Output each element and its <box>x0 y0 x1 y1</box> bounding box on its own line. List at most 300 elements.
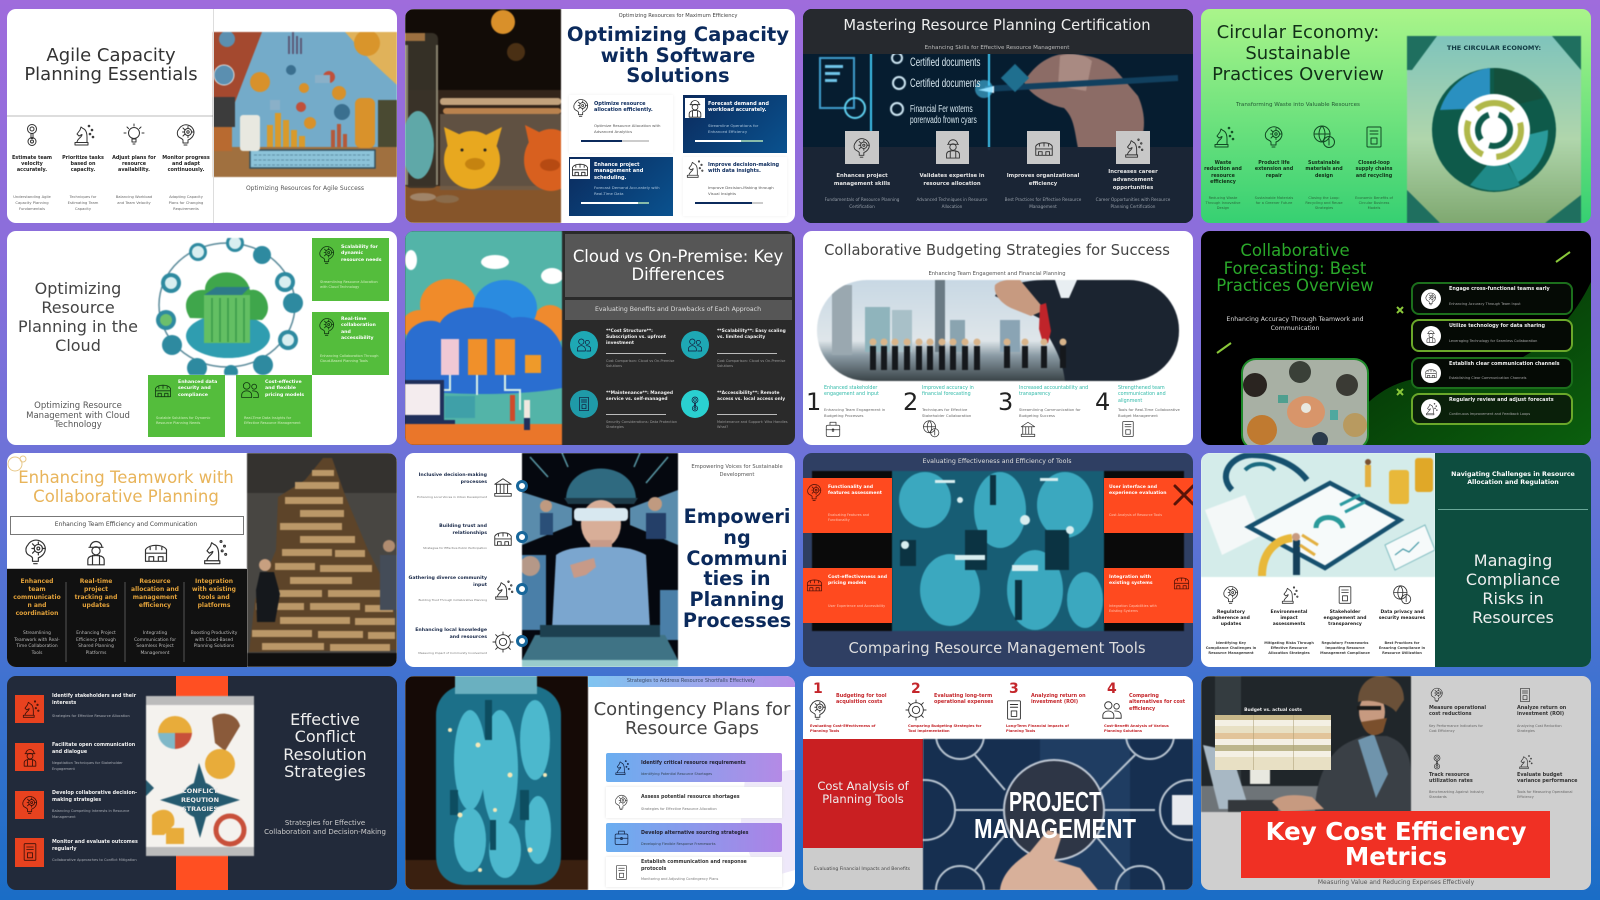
top band with subtitle <box>588 676 795 687</box>
heading <box>192 578 236 610</box>
heading: management skills <box>834 181 890 187</box>
slide title: Empoweri <box>684 505 790 528</box>
heading <box>1324 610 1366 628</box>
subtitle: Empowering Voices for Sustainable <box>691 464 783 470</box>
slide title <box>18 468 234 506</box>
item: monitor outcomes <box>15 838 143 868</box>
caption: Negotiation Techniques for Stakeholder <box>52 761 123 765</box>
caption <box>828 513 869 523</box>
caption: Teamwork with Real- <box>14 638 60 642</box>
heading: transparency <box>1019 392 1051 397</box>
icon: brain gear <box>1262 125 1286 149</box>
heading <box>641 859 747 873</box>
icon glyph <box>687 337 703 353</box>
icon: brain gear <box>22 538 50 566</box>
slide title: Planning Tools <box>822 792 904 806</box>
caption <box>1005 196 1081 210</box>
slide title: Resource <box>41 298 115 317</box>
heading: Prioritize tasks <box>62 155 104 161</box>
caption: Forecast Demand Accurately with <box>594 185 660 190</box>
number: 1 <box>806 388 821 416</box>
slide title: Key Cost Efficiency <box>1266 817 1526 846</box>
heading <box>178 380 217 399</box>
caption <box>594 185 660 196</box>
heading <box>606 391 673 403</box>
heading: Engage cross-functional teams early <box>1449 286 1550 292</box>
card: optimize allocation <box>569 95 673 153</box>
checklist line 3 <box>910 104 977 126</box>
caption: Boosting Productivity <box>191 631 237 636</box>
caption: Existing Systems <box>1109 609 1138 613</box>
caption: Seamless Project <box>136 644 174 649</box>
heading: velocity <box>21 161 43 167</box>
caption <box>1517 724 1562 734</box>
heading <box>112 155 156 173</box>
green side panel <box>1435 453 1591 667</box>
heading: variance performance <box>1517 778 1578 784</box>
slide title: Optimizing Capacity <box>567 23 789 46</box>
icon: board on red <box>15 838 44 867</box>
heading: Closed-loop <box>1358 161 1390 166</box>
heading <box>1108 168 1158 192</box>
checklist line 3: porenvado frown cyars <box>910 115 977 126</box>
heading <box>1031 693 1086 706</box>
caption: Developing Flexible Response Frameworks <box>641 842 716 846</box>
caption: Budgeting Processes <box>824 413 863 418</box>
slide title: Collaborative <box>1240 241 1350 260</box>
caption: Balancing Competing Interests in Resource <box>52 809 129 813</box>
caption <box>52 761 123 772</box>
panel: Mastering Resource Planning Certification <box>803 9 1193 223</box>
subtitle: Evaluating Effectiveness and Efficiency of Tools <box>922 458 1072 465</box>
icon: target gauge <box>27 124 37 146</box>
heading: compliance <box>178 393 208 398</box>
heading: pricing models <box>828 581 866 586</box>
item: product life <box>1249 124 1299 216</box>
heading: resource allocation <box>923 181 981 187</box>
caption: Cloud-Based Planning Tools <box>320 359 368 363</box>
item: scalability <box>679 328 791 378</box>
caption <box>1109 604 1157 614</box>
heading <box>1429 705 1486 718</box>
caption: Estimating Team <box>68 201 98 205</box>
heading: Functionality and <box>828 485 873 490</box>
heading: Enhances project <box>836 173 888 179</box>
subtitle <box>1226 316 1364 333</box>
slide title: Cloud vs On-Premise: Key <box>573 247 783 266</box>
red title box <box>1241 811 1550 878</box>
caption <box>169 195 203 211</box>
item: environmental <box>1263 583 1315 663</box>
caption: Stakeholder Collaboration <box>922 413 971 418</box>
heading: Integration <box>195 578 233 585</box>
pill: engage teams <box>1411 282 1573 315</box>
heading: pricing models <box>265 393 304 398</box>
heading: operational expenses <box>934 699 993 705</box>
column: project tracking <box>67 578 125 663</box>
slide title: with Software <box>601 44 755 66</box>
icon: knight on red <box>15 695 44 723</box>
heading <box>12 155 52 173</box>
icon: chart board <box>1003 699 1025 721</box>
slide title: Processes <box>683 609 791 632</box>
image: piggy banks in jars <box>405 9 562 223</box>
caption <box>13 195 51 211</box>
heading: Develop alternative sourcing strategies <box>641 831 749 836</box>
icon: brain gear <box>1221 585 1241 605</box>
heading: Enhanced data <box>178 380 217 385</box>
caption: Fundamentals of Resource Planning <box>825 197 899 202</box>
heading <box>341 245 382 264</box>
caption: Techniques for <box>70 195 96 199</box>
card: scalability <box>312 238 389 301</box>
slide title: Risks in <box>1482 589 1544 608</box>
icon glyph <box>576 337 592 353</box>
heading <box>1517 705 1566 718</box>
icon: knight <box>492 579 514 601</box>
column: resource allocation <box>126 578 184 663</box>
caption: Effective Resource <box>1271 646 1307 650</box>
heading: Improved accuracy in <box>922 386 974 391</box>
icon: chess knight <box>74 124 94 146</box>
heading: Enhanced <box>21 578 53 585</box>
heading: Enhanced stakeholder <box>824 386 877 391</box>
caption: Balancing Workload <box>116 195 152 199</box>
heading: adherence and <box>1212 616 1250 621</box>
heading: utilization rates <box>1429 778 1473 784</box>
checklist line 1: Certified documents <box>910 55 980 69</box>
subtitle: Development <box>720 472 754 478</box>
heading: supply chains <box>1356 167 1392 172</box>
image: woman with visor and hologram <box>522 453 678 667</box>
item: data privacy <box>1376 583 1428 663</box>
icon: machine <box>1027 131 1060 164</box>
image: circular economy poster <box>1407 36 1581 223</box>
item: stakeholder <box>1319 583 1371 663</box>
heading: Improves organizational <box>1007 173 1079 179</box>
heading: engagement and input <box>824 392 879 397</box>
subtitle: Optimizing Resource <box>34 401 122 411</box>
heading: Increases career <box>1108 169 1158 175</box>
caption: Efficiency <box>1517 795 1534 799</box>
caption: Real-Time Data <box>594 191 623 196</box>
number: 3 <box>998 388 1013 416</box>
image: pen on glowing certified checklist <box>803 9 1193 223</box>
subtitle: Communication <box>1271 325 1319 332</box>
caption <box>1118 407 1180 420</box>
panel: Optimizing Resource Planning in the Cloud <box>7 231 397 445</box>
image: man at laptop with cost table <box>1201 676 1411 812</box>
icon: target <box>1429 754 1445 770</box>
caption: Benchmarking Against Industry <box>1429 790 1484 794</box>
heading <box>1271 610 1307 628</box>
heading <box>1109 575 1153 587</box>
heading: opportunities <box>1113 185 1153 191</box>
item: operational cost <box>1429 687 1509 742</box>
icon: document <box>1335 585 1355 605</box>
icon: gear <box>905 699 927 721</box>
panel: Optimizing Capacity with Software Solutions <box>405 9 795 223</box>
heading <box>717 391 785 403</box>
icon: knight on white circle <box>1421 399 1441 419</box>
decor: lime slashes <box>1210 250 1580 400</box>
heading: and resources <box>450 635 487 640</box>
caption: Streamline Operations for <box>708 123 758 128</box>
caption: Strategies <box>606 425 624 429</box>
row: identify requirements <box>606 753 782 782</box>
caption: Strategies <box>1315 206 1333 210</box>
caption: Design <box>1217 206 1229 210</box>
slide title: Conflict <box>295 727 355 746</box>
pill: review <box>1411 393 1573 425</box>
caption <box>1019 407 1081 420</box>
item: monitor progress <box>162 124 210 211</box>
heading: reduction and <box>1204 167 1242 172</box>
slide title: Resource Gaps <box>625 718 759 739</box>
slide title <box>573 248 783 283</box>
heading: updates <box>82 602 110 609</box>
slide title: Solutions <box>626 64 730 87</box>
heading: and recycling <box>1356 174 1392 179</box>
icon: document <box>1362 125 1386 149</box>
caption: Allocation Strategies <box>1268 651 1310 655</box>
caption <box>810 724 875 734</box>
caption: Continuous Improvement and Feedback Loops <box>1449 412 1530 416</box>
caption: Models <box>1368 206 1380 210</box>
item: return on investment <box>1517 687 1589 742</box>
item: maintenance <box>568 390 678 440</box>
image: desk wall of planning objects <box>212 31 397 178</box>
caption <box>68 195 98 211</box>
progress bar <box>581 202 649 204</box>
icon: tools <box>1172 483 1191 502</box>
caption: Capacity <box>75 207 91 211</box>
caption <box>1355 196 1393 212</box>
caption <box>717 359 785 369</box>
card: functionality <box>803 478 892 533</box>
icon: brain gear <box>317 245 337 265</box>
text in image: poster heading: THE CIRCULAR ECONOMY: <box>1447 44 1541 52</box>
caption: Enhancing Team Engagement in <box>824 407 885 412</box>
caption <box>908 724 982 734</box>
caption: Requirements <box>173 207 199 211</box>
icon: document <box>613 864 630 881</box>
heading: Analyzing return on <box>1031 693 1086 699</box>
caption: Key Performance Indicators for <box>1429 724 1483 728</box>
caption: Understanding Agile <box>13 195 51 199</box>
caption: Standards <box>1429 795 1447 799</box>
subtitle: Transforming Waste into Valuable Resources <box>1236 102 1360 108</box>
caption: Engagement <box>52 766 75 770</box>
caption <box>244 416 301 427</box>
caption: Strategies for Effective Resource Allocation <box>52 714 130 718</box>
heading: coordination <box>16 610 58 617</box>
caption <box>1517 790 1573 800</box>
heading: Gathering diverse community <box>409 576 487 581</box>
text in image: poster words: REQUTION <box>181 796 219 804</box>
orange band <box>176 676 228 890</box>
icon: worker <box>936 131 969 164</box>
heading: Environmental <box>1271 610 1307 615</box>
heading: financial forecasting <box>922 392 971 397</box>
caption: Planning Solutions <box>194 644 234 649</box>
column: integration <box>185 578 243 663</box>
caption <box>606 420 677 430</box>
item: decision-making <box>405 473 530 505</box>
heading <box>834 173 890 187</box>
divider <box>1438 509 1588 510</box>
red title block <box>803 739 923 848</box>
image: isometric compliance illustration <box>1201 453 1435 577</box>
slide title: Contingency Plans for <box>594 699 790 720</box>
image: cloud ring with container <box>148 238 312 375</box>
heading: resource needs <box>341 258 382 263</box>
heading: Regulatory <box>1217 610 1245 615</box>
heading: relationships <box>452 531 487 536</box>
heading: Validates expertise in <box>919 173 985 179</box>
subtitle: Allocation and Regulation <box>1467 479 1559 486</box>
icon: brain gear <box>805 483 824 502</box>
progress bar <box>695 202 763 204</box>
item 3: ROI <box>1002 680 1098 738</box>
caption: Cost Efficiency <box>1429 729 1455 733</box>
image: glowing bottles in a jar <box>405 676 588 890</box>
heading: scheduling. <box>594 175 626 181</box>
caption: Certification <box>849 204 875 209</box>
icon: knight <box>1279 585 1299 605</box>
icon: teal circle <box>681 331 709 359</box>
caption: User Experience and Accessibility <box>828 604 885 608</box>
heading: resource <box>122 161 146 167</box>
caption: Functionality <box>828 518 850 522</box>
heading <box>409 576 487 589</box>
subtitle: Evaluating Financial Impacts and Benefits <box>814 867 910 872</box>
icon glyph <box>576 396 592 412</box>
slide title: ng <box>723 526 751 549</box>
icon: gear <box>492 631 514 653</box>
heading <box>1305 161 1343 180</box>
item: community input <box>405 576 530 608</box>
heading: design <box>1315 174 1333 179</box>
subtitle: Enhancing Team Engagement and Financial Planning <box>928 271 1066 277</box>
icon: people <box>240 380 260 400</box>
marker dot <box>516 635 528 647</box>
heading: investment (ROI) <box>1031 699 1078 705</box>
caption: Resource Utilization <box>1382 651 1422 655</box>
column: team communication <box>8 578 66 663</box>
heading: Real-time <box>80 578 112 585</box>
slide title: Practices Overview <box>1216 276 1374 295</box>
caption: Advanced Analytics <box>594 129 632 134</box>
heading: Assess potential resource shortages <box>641 795 740 800</box>
caption: Platforms <box>86 650 106 656</box>
icon: machine <box>570 159 590 179</box>
heading: vs. limited capacity <box>717 335 765 340</box>
heading <box>1517 772 1578 785</box>
text in image: poster words: STRAGIES <box>182 805 218 813</box>
caption: Building Trust Through Collaborative Planning <box>418 598 487 602</box>
item 1: acquisition costs <box>806 680 902 738</box>
slide title <box>594 700 790 738</box>
heading: accurately. <box>17 167 47 173</box>
heading: **Maintenance**: Managed <box>606 391 673 396</box>
image caption: Optimizing Resources for Agile Success <box>246 185 364 192</box>
caption: Planning Certification <box>1111 204 1155 209</box>
caption: Cost Comparison: Cloud vs On-Premise <box>606 359 674 363</box>
slide title: Cost Analysis of <box>817 779 909 793</box>
slide title: Differences <box>631 264 725 284</box>
caption: Efficiency through <box>76 638 116 642</box>
caption: Enhancing Collaboration Through <box>320 354 378 358</box>
heading: Data privacy and <box>1380 610 1424 615</box>
heading <box>13 578 61 618</box>
slide title <box>1212 22 1384 85</box>
caption: Recycling and Reuse <box>1305 201 1343 205</box>
caption: Ensuring Compliance in <box>1379 646 1425 650</box>
caption: Closing the Loop: <box>1308 196 1340 200</box>
caption <box>156 416 210 427</box>
slide title: Agile Capacity <box>46 45 176 66</box>
caption <box>320 354 378 365</box>
card: integration <box>1104 568 1193 623</box>
heading: and <box>341 330 351 335</box>
heading: investment (ROI) <box>1517 711 1564 717</box>
subtitle <box>1451 471 1575 487</box>
icon: worker on red <box>15 743 44 771</box>
heading: Regularly review and adjust forecasts <box>1449 397 1554 403</box>
title box <box>565 234 792 297</box>
heading: project <box>84 586 108 593</box>
caption: Collaborative Approaches to Conflict Mitigation <box>52 858 137 862</box>
slide title: Metrics <box>1345 842 1447 871</box>
icon: dollar document <box>1119 420 1137 438</box>
subtitle: Strategies to Address Resource Shortfalls Effectively <box>627 678 755 684</box>
heading: Measure operational <box>1429 705 1486 711</box>
caption: Planning Solutions <box>1104 729 1142 733</box>
card: forecast demand <box>683 95 787 153</box>
text in image: poster words: CONFLICT <box>182 787 218 795</box>
black lower panel <box>7 568 247 667</box>
heading: communication and <box>1118 392 1166 397</box>
caption: Measuring Impact of Community Involvement <box>418 651 487 655</box>
heading: Cost-effectiveness and <box>828 575 887 580</box>
slide title: Communi <box>686 547 788 570</box>
heading <box>75 578 117 610</box>
caption: Planning Tools <box>1006 729 1035 733</box>
heading <box>836 693 887 706</box>
heading: with data insights. <box>708 168 761 174</box>
heading: collaboration <box>341 323 376 328</box>
caption <box>14 631 60 657</box>
subtitle: Measuring Value and Reducing Expenses Effectively <box>1318 879 1474 886</box>
item 1: stakeholder engagement <box>806 385 896 440</box>
caption: Time Collaboration <box>16 644 58 649</box>
item: utilization <box>1429 754 1509 804</box>
heading <box>52 840 138 853</box>
heading <box>934 693 993 706</box>
heading: materials and <box>1305 167 1343 172</box>
heading: management <box>133 594 177 601</box>
caption <box>1320 641 1370 656</box>
icon: brain gear <box>613 794 630 811</box>
caption <box>916 197 988 209</box>
caption: Integrating <box>143 631 167 636</box>
heading <box>919 173 985 187</box>
icon: brain gear <box>807 699 829 721</box>
lower band <box>803 147 1193 223</box>
slide title: Collaborative Budgeting Strategies for Success <box>824 242 1170 259</box>
item 2: operational expenses <box>904 680 1000 738</box>
